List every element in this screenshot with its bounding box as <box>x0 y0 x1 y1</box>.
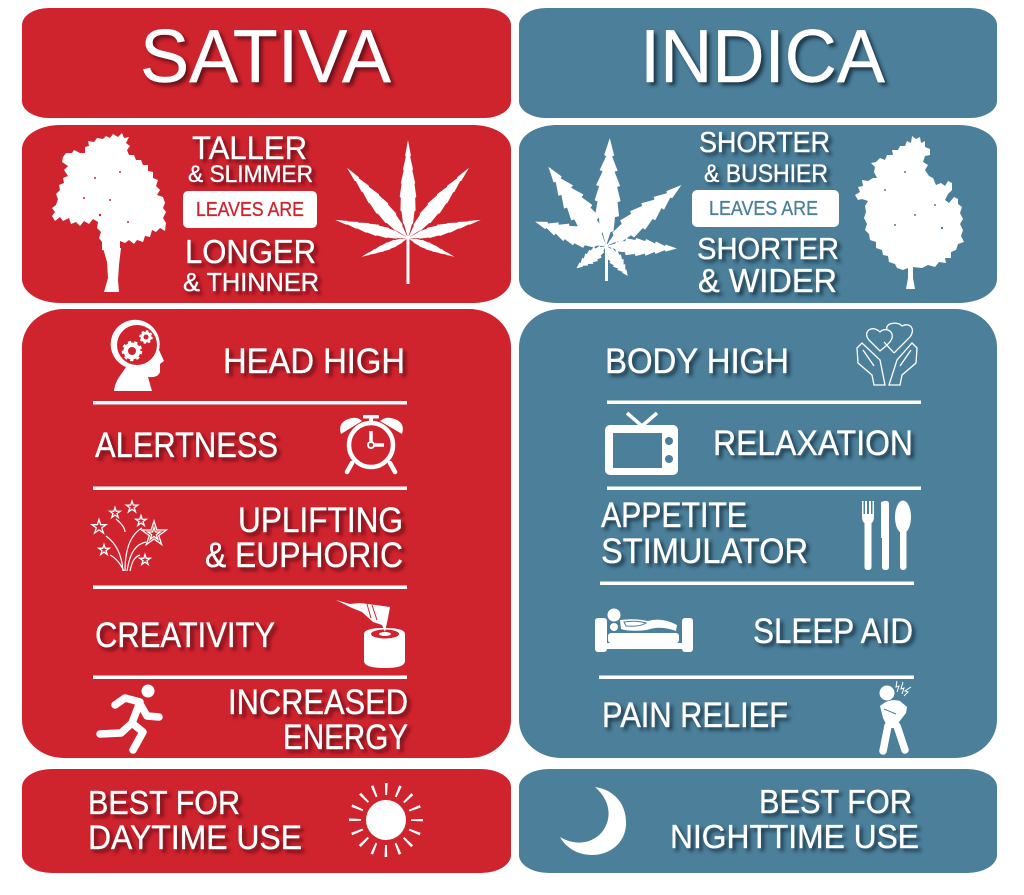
label: leaves are <box>692 190 839 227</box>
text: pain relief: PAIN RELIEF <box>602 696 788 735</box>
row dividers <box>93 401 407 679</box>
panel: indica best for <box>519 769 997 873</box>
label: leaves are: LEAVES ARE <box>196 199 304 221</box>
text: appetite stimulator: STIMULATOR <box>601 532 808 571</box>
text: shorter and bushier: & BUSHIER <box>704 160 828 188</box>
label: leaves are <box>183 191 317 228</box>
panel: indica header <box>519 8 997 118</box>
text: sleep aid: SLEEP AID <box>753 612 913 651</box>
icon: alarm clock <box>340 415 403 472</box>
icon: sun <box>355 789 417 851</box>
panel: indica effects <box>519 309 997 758</box>
text: shorter and wider: SHORTER <box>697 231 839 266</box>
icon: television <box>605 413 678 475</box>
text: increased energy: INCREASED <box>228 683 408 722</box>
text: best for daytime use <box>88 784 302 857</box>
text: shorter and wider <box>697 231 839 299</box>
panel: sativa header <box>22 8 511 118</box>
text: appetite stimulator <box>601 496 808 571</box>
icon: fork knife spoon <box>862 500 911 570</box>
text: best for nighttime use <box>670 783 919 855</box>
panel: sativa plant shape <box>22 125 511 303</box>
text: shorter and bushier <box>699 127 830 188</box>
icon: hands holding hearts <box>857 323 917 385</box>
text: shorter and bushier: SHORTER <box>699 127 830 159</box>
text: uplifting and euphoric: & EUPHORIC <box>205 536 403 575</box>
icon: indica leaf <box>532 138 689 281</box>
text: relaxation: RELAXATION <box>713 424 913 463</box>
text: body high: BODY HIGH <box>605 342 789 381</box>
title: INDICA: INDICA <box>640 14 885 98</box>
text: appetite stimulator: APPETITE <box>601 496 747 535</box>
text: shorter and wider: & WIDER <box>698 262 837 299</box>
icon: head with gears <box>111 320 164 391</box>
icon: person in bed <box>595 608 693 652</box>
icon: paint brush and can <box>336 600 405 668</box>
text: uplifting and euphoric: UPLIFTING <box>238 501 403 540</box>
row dividers <box>599 400 921 679</box>
text: alertness: ALERTNESS <box>95 426 278 465</box>
icon: sativa tree <box>52 133 166 292</box>
icon: running person <box>100 684 159 750</box>
text: taller and slimmer: & SLIMMER <box>188 161 313 188</box>
panel: sativa best for <box>22 769 511 873</box>
text: longer and thinner: LONGER <box>185 233 316 270</box>
title: SATIVA: SATIVA <box>140 14 391 98</box>
text: taller and slimmer <box>188 130 313 188</box>
text: best for nighttime use: NIGHTTIME USE <box>670 818 919 855</box>
text: best for nighttime use: BEST FOR <box>759 783 912 820</box>
text: best for daytime use: BEST FOR <box>88 784 240 821</box>
text: longer and thinner <box>183 233 319 297</box>
icon: sativa leaf <box>334 140 482 284</box>
text: best for daytime use: DAYTIME USE <box>88 819 302 857</box>
icon: person in pain <box>880 681 911 751</box>
icon: crescent moon <box>560 787 626 855</box>
icon: fireworks <box>92 501 166 571</box>
panel: indica plant shape <box>519 125 997 303</box>
text: increased energy: ENERGY <box>283 718 408 757</box>
label: leaves are: LEAVES ARE <box>709 198 818 220</box>
icon: indica tree <box>855 136 964 289</box>
text: taller and slimmer: TALLER <box>192 130 307 166</box>
text: head high: HEAD HIGH <box>223 342 405 381</box>
text: longer and thinner: & THINNER <box>183 267 319 297</box>
panel: sativa effects <box>22 309 511 758</box>
text: creativity: CREATIVITY <box>95 616 275 655</box>
text: uplifting and euphoric <box>205 501 403 575</box>
text: increased energy <box>228 683 408 757</box>
